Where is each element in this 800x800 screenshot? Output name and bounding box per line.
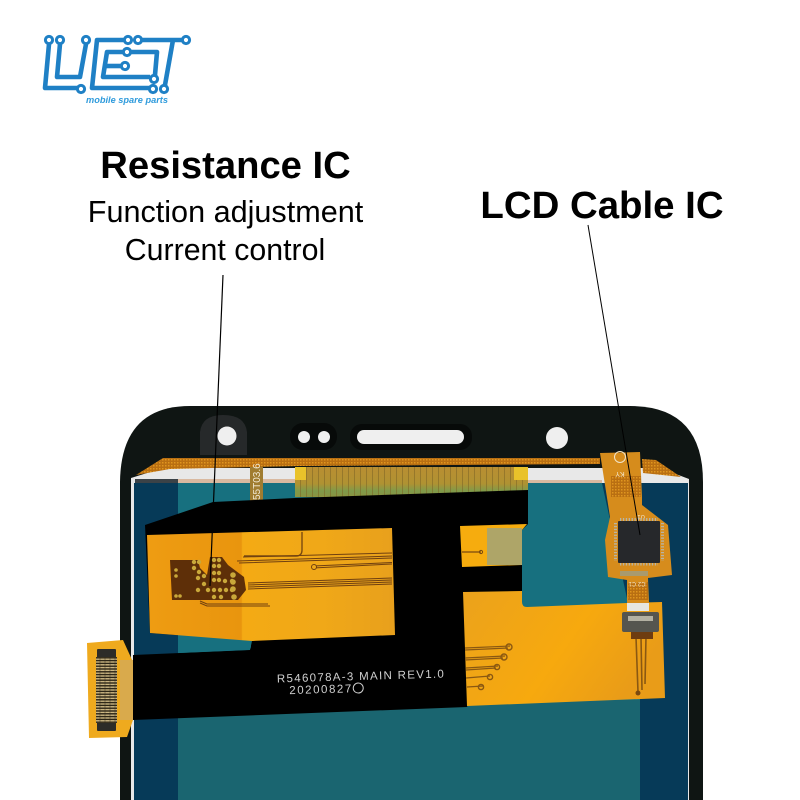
printed board code: R546078A-3 MAIN REV1.0 — [277, 669, 444, 685]
LCD cable flex circuit — [600, 452, 672, 603]
text: Function adjustment: Function adjustment — [88, 195, 364, 229]
heading: LCD Cable IC: LCD Cable IC — [480, 184, 724, 227]
board connector — [622, 603, 659, 639]
vertical label strip: 55T03.6 — [252, 463, 263, 500]
side flex connector — [87, 640, 133, 738]
white camera and sensor openings — [200, 415, 568, 455]
gold flex band — [295, 467, 528, 497]
resistance IC chip pads — [170, 557, 246, 600]
bezel — [120, 406, 703, 800]
heading: Resistance IC: Resistance IC — [100, 144, 351, 187]
white inner frame — [131, 468, 689, 800]
text: Current control: Current control — [125, 234, 325, 267]
LCD cable flex circuit: C2 C1 — [628, 580, 646, 586]
IC chip — [616, 520, 662, 564]
logo — [45, 36, 190, 106]
logo: mobile spare parts — [86, 95, 168, 106]
leader line: LCD Cable IC — [588, 225, 640, 535]
yellow flex piece with metal foil — [460, 524, 527, 567]
teal tab — [178, 632, 251, 653]
orange flex: resistance IC area — [147, 528, 395, 641]
printed board code — [277, 669, 444, 697]
top flex strip — [136, 458, 600, 475]
LCD cable flex circuit: KY — [615, 470, 625, 477]
black insulation sheet — [133, 490, 528, 720]
leader line: Resistance IC — [210, 275, 223, 586]
dark blue panel — [134, 483, 688, 800]
LCD cable flex circuit: U1 — [637, 513, 645, 519]
phone display module — [87, 406, 703, 800]
orange flex: lower right — [463, 591, 665, 706]
printed board code: 20200827 — [289, 683, 351, 697]
teal panel — [178, 483, 640, 800]
